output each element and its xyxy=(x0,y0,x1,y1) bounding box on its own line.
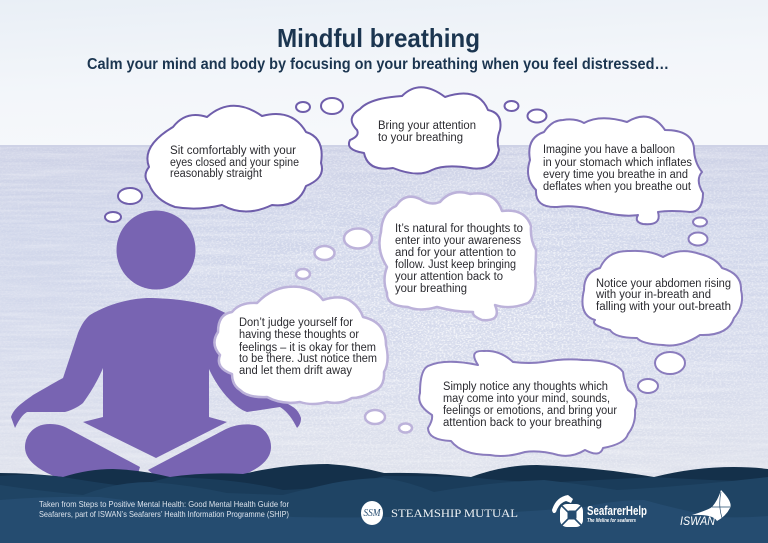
thought cloud: sit comfortably: reasonably straight xyxy=(170,168,263,180)
figure torso and arms xyxy=(11,298,301,458)
thought cloud: natural thoughts: your breathing xyxy=(395,283,467,295)
thought cloud: natural thoughts xyxy=(379,192,536,320)
thought cloud: sit comfortably: Sit comfortably with your xyxy=(170,145,296,157)
logo: SeafarerHelp xyxy=(552,495,647,527)
figure left leg xyxy=(25,424,140,480)
thought cloud: natural thoughts: It’s natural for thoughts to xyxy=(395,223,523,235)
meditating figure xyxy=(11,210,301,480)
sea waves footer band xyxy=(0,464,768,543)
thought cloud: bring your attention xyxy=(349,87,500,174)
thought cloud: simply notice xyxy=(419,351,636,456)
thought cloud: sit comfortably xyxy=(146,106,322,212)
figure right leg xyxy=(148,424,271,480)
logo: ISWAN xyxy=(680,490,731,528)
thought cloud: notice your abdomen xyxy=(582,251,742,346)
thought cloud: bring your attention: Bring your attention xyxy=(378,120,476,132)
thought cloud: don't judge yourself: and let them drift away xyxy=(239,365,352,377)
source note: Taken from Steps to Positive Mental Health: Good Mental Health Guide for xyxy=(39,499,289,509)
thought cloud: natural thoughts: and for your attention to xyxy=(395,247,516,259)
thought bubble dots xyxy=(105,98,708,432)
thought cloud: imagine a balloon: every time you breathe in and xyxy=(543,169,688,181)
logo: SeafarerHelp: The lifeline for seafarers xyxy=(587,518,636,524)
thought cloud: imagine a balloon: Imagine you have a balloon xyxy=(543,144,675,156)
logo: Steamship Mutual: SSM xyxy=(364,508,381,519)
logo: Steamship Mutual xyxy=(361,501,518,525)
thought cloud: bring your attention: to your breathing xyxy=(378,132,463,144)
thought cloud: don't judge yourself: Don’t judge yourself for xyxy=(239,317,353,329)
thought cloud: don't judge yourself: to be there. Just notice them xyxy=(239,353,377,365)
logo: SeafarerHelp: SeafarerHelp xyxy=(587,504,647,518)
source note xyxy=(39,499,289,519)
thought cloud: don't judge yourself: having these thoughts or xyxy=(239,329,359,341)
subtitle: Calm your mind and body by focusing on your breathing when you feel distressed… xyxy=(87,56,669,73)
thought cloud: notice your abdomen: Notice your abdomen rising xyxy=(596,278,731,290)
thought cloud: natural thoughts: enter into your awareness xyxy=(395,235,521,247)
thought cloud: sit comfortably: eyes closed and your spine xyxy=(170,157,299,169)
thought cloud: natural thoughts: follow. Just keep bringing xyxy=(395,259,516,271)
thought cloud: don't judge yourself: feelings – it is okay for them xyxy=(239,342,376,354)
logo: ISWAN: ISWAN xyxy=(680,516,716,528)
source note: Seafarers, part of ISWAN’s Seafarers’ Health Information Programme (SHIP) xyxy=(39,509,289,519)
title: Mindful breathing xyxy=(277,23,480,53)
thought cloud: imagine a balloon: in your stomach which inflates xyxy=(543,157,692,169)
thought cloud: natural thoughts: your attention back to xyxy=(395,271,503,283)
thought cloud: notice your abdomen: falling with your out-breath xyxy=(596,301,731,313)
figure head xyxy=(116,210,196,290)
thought cloud: simply notice: feelings or emotions, and bring your xyxy=(443,405,617,417)
thought cloud: simply notice: may come into your mind, sounds, xyxy=(443,393,610,405)
thought cloud: don't judge yourself xyxy=(214,287,388,404)
logo: Steamship Mutual: STEAMSHIP MUTUAL xyxy=(391,508,518,520)
thought cloud: imagine a balloon xyxy=(528,117,703,224)
thought cloud: imagine a balloon: deflates when you breathe out xyxy=(543,181,692,193)
thought cloud: simply notice: Simply notice any thoughts which xyxy=(443,381,608,393)
thought cloud: simply notice: attention back to your breathing xyxy=(443,417,602,429)
thought cloud: notice your abdomen: with your in-breath and xyxy=(595,289,711,301)
